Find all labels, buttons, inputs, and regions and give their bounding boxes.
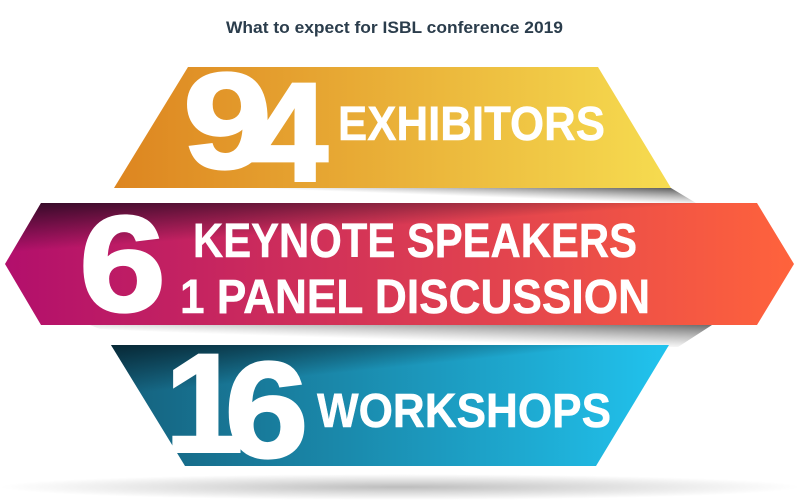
panel top shading bbox=[5, 203, 794, 325]
panel: speakers bbox=[5, 188, 794, 340]
floor shadow bbox=[0, 474, 800, 500]
number: 16 bbox=[165, 324, 308, 486]
panel shape: magenta hexagon bbox=[5, 203, 794, 325]
panel shape: teal trapezoid bbox=[111, 345, 669, 466]
title: What to expect for ISBL conference 2019 bbox=[226, 18, 563, 37]
number: 94: 4 bbox=[250, 54, 328, 210]
number: 6: 6 bbox=[79, 188, 166, 340]
label: workshops: WORKSHOPS bbox=[317, 385, 611, 438]
number: 94 bbox=[183, 46, 328, 210]
label: panel discussion: 1 PANEL DISCUSSION bbox=[180, 271, 650, 324]
label: exhibitors: EXHIBITORS bbox=[338, 98, 605, 151]
number: 16: 6 bbox=[225, 335, 308, 486]
shadow: under top panel bbox=[160, 188, 696, 203]
panel shape: orange trapezoid bbox=[114, 67, 671, 188]
panel: exhibitors bbox=[114, 46, 671, 210]
panel: workshops bbox=[111, 324, 669, 486]
number: 16: 1 bbox=[165, 324, 243, 482]
number: 94: 9 bbox=[183, 46, 272, 197]
shadow: under middle panel bbox=[90, 325, 712, 347]
label: keynote speakers: KEYNOTE SPEAKERS bbox=[193, 215, 637, 268]
panel top shading bbox=[111, 345, 669, 466]
